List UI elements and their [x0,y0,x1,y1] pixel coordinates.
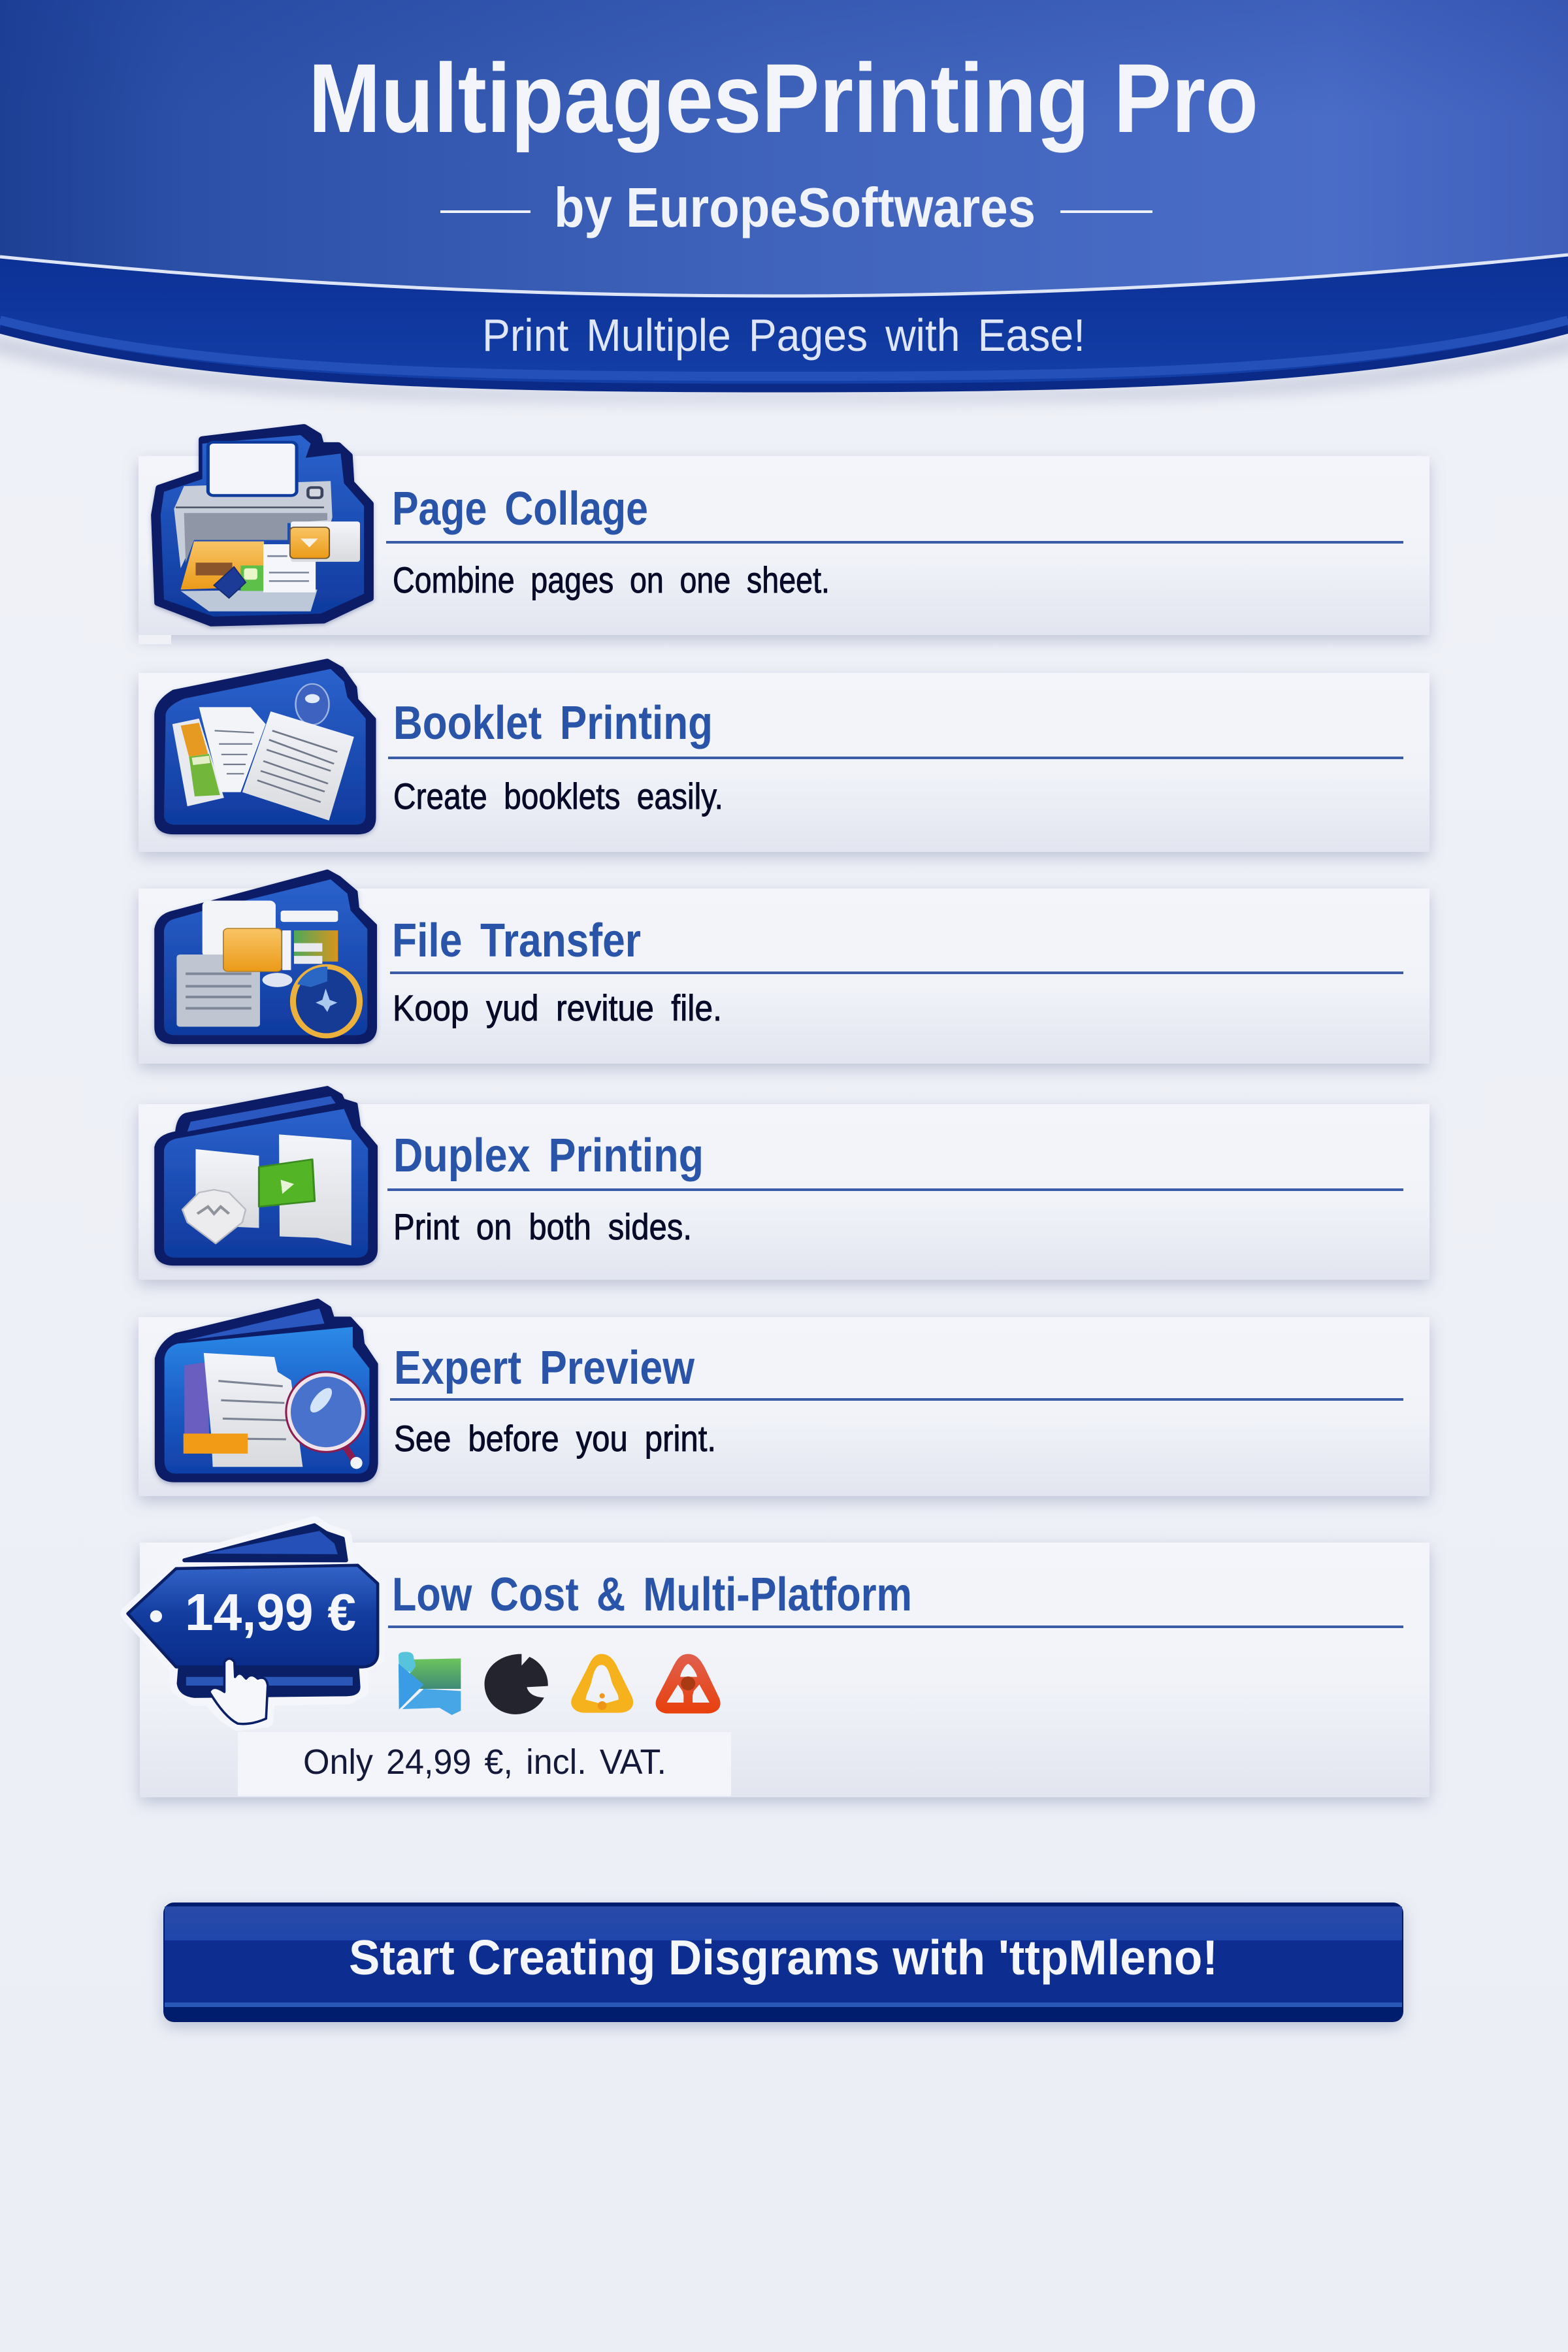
icon: platform folder [399,1652,461,1715]
icon: platform warning [656,1654,721,1714]
price note: Only 24,99 €, incl. VAT. [303,1742,666,1782]
icon: file transfer [157,872,374,1042]
heading: Low Cost & Multi-Platform [392,1569,912,1621]
button label: Start Creating Disgrams with 'ttpMleno! [349,1930,1218,1985]
icon: booklet [157,661,374,832]
panel: page collage [139,427,1429,644]
description: Koop yud revitue file. [393,987,722,1028]
ribbon band [0,255,1568,392]
panel: low cost and multi-platform [128,1524,1429,1797]
platform icons [399,1652,721,1715]
description: See before you print. [394,1418,716,1459]
icon: preview magnifier [157,1301,376,1480]
icon: price tag [128,1524,378,1724]
icon: platform bell [571,1654,633,1713]
call-to-action button [163,1903,1403,2022]
icon: printer [155,427,370,623]
price text: 14,99 € [185,1583,356,1641]
tagline: Print Multiple Pages with Ease! [482,310,1085,361]
header banner [0,0,1568,402]
price note [238,1732,731,1796]
panel: duplex printing [139,1088,1429,1280]
title: MultipagesPrinting Pro [308,43,1258,153]
panel: expert preview [139,1301,1429,1496]
panel: booklet printing [139,661,1429,852]
description: Print on both sides. [393,1206,692,1247]
subtitle: by EuropeSoftwares [554,177,1036,239]
icon: platform dark circle [485,1654,548,1714]
heading: Page Collage [392,483,648,535]
heading: Duplex Printing [393,1130,704,1182]
heading: File Transfer [392,915,641,967]
icon: duplex pages [157,1088,375,1264]
description: Combine pages on one sheet. [393,559,830,600]
panel: file transfer [139,872,1429,1064]
description: Create booklets easily. [393,776,723,817]
heading: Expert Preview [394,1342,695,1394]
heading: Booklet Printing [393,697,713,749]
